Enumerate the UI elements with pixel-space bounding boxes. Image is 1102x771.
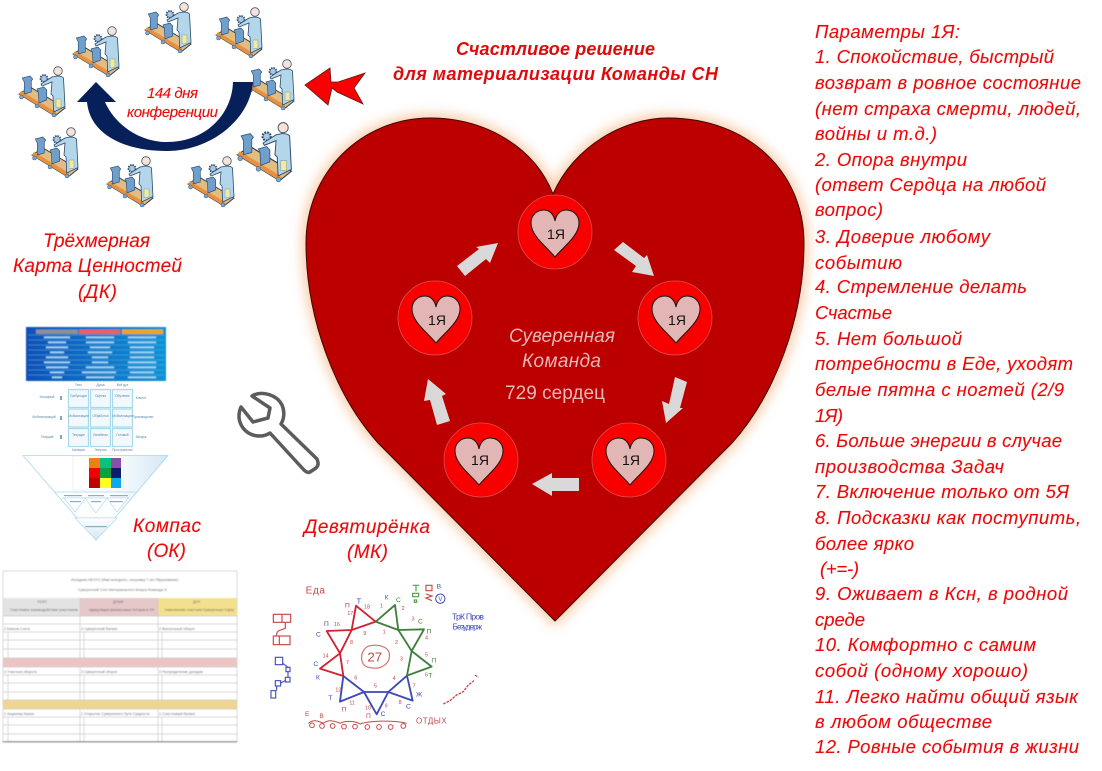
thumbnail: hand-drawn nine-point star: 16 [334, 622, 340, 628]
thumbnail: hand-drawn nine-point star: П [342, 707, 347, 714]
node: 1Я lower right [592, 423, 666, 497]
node: 1Я lower right: 1Я [622, 452, 640, 468]
thumbnail: hand-drawn nine-point star: С [313, 661, 318, 668]
thumbnail: 3x3 matrix: Материя [72, 448, 85, 452]
parameters list: 4. Стремление делать [815, 276, 1027, 297]
node: 1Я left: 1Я [428, 312, 446, 328]
thumbnail: hand-drawn nine-point star: V [438, 597, 442, 603]
wrench icon [239, 393, 318, 472]
thumbnail: hand-drawn nine-point star: 3 [412, 617, 415, 623]
thumbnail: 3x3 matrix: Текущие [72, 433, 85, 437]
parameters list: производства Задач [815, 456, 1004, 477]
heart caption: Команда [522, 351, 601, 372]
node: 1Я right: 1Я [668, 312, 686, 328]
thumbnail: 3x3 matrix: Готовый [116, 433, 129, 437]
thumbnail: hand-drawn nine-point star: 11 [349, 701, 355, 707]
cycle arrows [424, 242, 687, 496]
parameters list: белые пятна с ногтей (2/9 [815, 379, 1064, 400]
thumbnail: 3x3 matrix: Линейная [93, 433, 108, 437]
parameters list: Параметры 1Я: [815, 21, 960, 42]
title: Счастливое решение [456, 39, 655, 59]
label: 144 days of conference: 144 дня [147, 85, 198, 102]
label: 144 days of conference [127, 85, 219, 121]
thumbnail: hand-drawn nine-point star: К [385, 594, 389, 601]
node: 1Я lower left [444, 423, 518, 497]
thumbnail: report table: Наполнение счастьем Суверенных Сфер [165, 608, 234, 612]
thumbnail: hand-drawn nine-point star: Еда [306, 585, 325, 596]
thumbnail: hand-drawn nine-point star: 2 [395, 640, 398, 646]
parameters list: 2. Опора внутри [814, 149, 967, 170]
thumbnail: report table: 1 Счастливый баланс [159, 712, 195, 716]
parameters list: 3. Доверие любому [815, 226, 992, 247]
parameters list: собой (одному хорошо) [815, 660, 1028, 681]
thumbnail: 3x3 matrix: Всё дух [117, 383, 129, 387]
thumbnail: report table: 3 Распределение доходов [159, 670, 203, 674]
heart glow and main heart [306, 118, 804, 621]
thumbnail: hand-drawn nine-point star: Т [328, 695, 332, 702]
thumbnail: 3x3 matrix: Мобилизующий [32, 415, 56, 419]
thumbnail: 3x3 matrix: Энергия [94, 448, 107, 452]
parameters list: 9. Оживает в Ксн, в родной [815, 583, 1068, 604]
thumbnail: hand-drawn nine-point star: Т [428, 672, 432, 679]
thumbnail: triangle compass [23, 456, 168, 540]
thumbnail: hand-drawn nine-point star: 6 [354, 675, 357, 681]
thumbnail: hand-drawn nine-point star: 8 [399, 700, 402, 706]
parameters list: 5. Нет большой [815, 328, 962, 349]
thumbnail: 3x3 matrix: Производство [133, 415, 154, 419]
label: 3D value map [13, 231, 182, 303]
parameters list: (ответ Сердца на любой [815, 174, 1046, 195]
thumbnail: hand-drawn nine-point star [271, 584, 484, 729]
thumbnail: value map table [26, 327, 166, 381]
thumbnail: 3x3 matrix: Текущий [41, 435, 54, 439]
parameters list: 8. Подсказки как поступить, [815, 507, 1081, 528]
thumbnail: report table: ДУША [113, 600, 124, 604]
thumbnail: hand-drawn nine-point star: С [406, 703, 411, 710]
thumbnail: hand-drawn nine-point star: 6 [425, 673, 428, 679]
thumbnail: hand-drawn nine-point star: 18 [364, 605, 370, 611]
parameters list: возврат в ровное состояние [815, 72, 1081, 93]
node: 1Я left [398, 281, 472, 355]
parameters list: в любом обществе [815, 711, 992, 732]
thumbnail: hand-drawn nine-point star: П [324, 621, 329, 628]
thumbnail: report table: 2 Банков Счета [4, 627, 30, 631]
thumbnail: hand-drawn nine-point star: 1 [380, 603, 383, 609]
label: 3D value map: Карта Ценностей [13, 256, 182, 277]
thumbnail: report table: Счастливое взаимодействие участников [10, 608, 78, 612]
thumbnail: hand-drawn nine-point star: 12 [335, 688, 341, 694]
thumbnail: hand-drawn nine-point star: С [418, 618, 423, 625]
thumbnail: hand-drawn nine-point star: 9 [363, 631, 366, 637]
thumbnail: report table: 2 Суверенный баланс [81, 627, 118, 631]
node: 1Я top [518, 195, 592, 269]
thumbnail: 3x3 matrix: Мобилизация [112, 414, 133, 418]
node: 1Я right [638, 281, 712, 355]
heart caption: 729 сердец [505, 383, 605, 404]
thumbnail: 3x3 matrix: Душа [96, 383, 105, 387]
thumbnail: hand-drawn nine-point star: К [316, 674, 320, 681]
parameters list: 10. Комфортно с самим [815, 634, 1036, 655]
label: compass [133, 516, 202, 562]
thumbnail: hand-drawn nine-point star: С [396, 597, 401, 604]
parameters list: войны и т.д.) [815, 123, 937, 144]
parameters list: (нет страха смерти, людей, [815, 98, 1081, 119]
conference ring of workers [19, 3, 294, 207]
parameters list: 1Я) [815, 405, 843, 426]
thumbnail: hand-drawn nine-point star: П [431, 658, 436, 665]
thumbnail: report table: 2 Вексельный оборот [159, 627, 195, 631]
thumbnail: hand-drawn nine-point star: 4 [393, 676, 396, 682]
thumbnail: hand-drawn nine-point star: 7 [413, 683, 416, 689]
thumbnail: hand-drawn nine-point star: ОТДЫХ [416, 716, 447, 725]
thumbnail: hand-drawn nine-point star: ТрК Пров [452, 611, 484, 621]
thumbnail: hand-drawn nine-point star: 10 [365, 705, 371, 711]
thumbnail: report table: 3 Суверенный оборот [81, 670, 118, 674]
label: 144 days of conference: конференции [127, 104, 219, 121]
thumbnail: report table [3, 571, 237, 742]
thumbnail: hand-drawn nine-point star: 5 [374, 683, 377, 689]
thumbnail: 3x3 matrix [32, 383, 154, 452]
thumbnail: 3x3 matrix: Обработка [92, 414, 109, 418]
thumbnail: hand-drawn nine-point star: В [319, 713, 324, 720]
title [393, 39, 719, 84]
title: для материализации Команды СН [393, 64, 719, 84]
thumbnail: report table: 1 Акционер Банка [4, 712, 34, 716]
thumbnail: hand-drawn nine-point star: С [316, 632, 321, 639]
thumbnail: hand-drawn nine-point star: П [427, 628, 432, 635]
thumbnail: hand-drawn nine-point star: П [345, 602, 350, 609]
heart caption: Суверенная [509, 326, 615, 347]
thumbnail: report table: 3 Участков оборота [4, 670, 37, 674]
thumbnail: 3x3 matrix: Обучение [115, 394, 130, 398]
thumbnail: 3x3 matrix: Пространство [112, 448, 133, 452]
parameters list: среде [815, 609, 865, 630]
parameters list: вопрос) [815, 199, 883, 220]
parameters list: 12. Ровные события в жизни [815, 736, 1079, 757]
thumbnail: hand-drawn nine-point star: 5 [425, 653, 428, 659]
label: compass: (ОК) [147, 541, 186, 562]
parameters list: событию [815, 252, 902, 273]
node: 1Я top: 1Я [547, 226, 565, 242]
thumbnail: hand-drawn nine-point star: 27 [367, 649, 382, 664]
parameters list: 7. Включение только от 5Я [815, 481, 1069, 502]
parameters list: 1. Спокойствие, быстрый [815, 46, 1054, 67]
label: compass: Компас [133, 516, 202, 537]
label: 3D value map: Трёхмерная [43, 231, 150, 252]
thumbnail: report table: ТЕЛО [37, 600, 47, 604]
thumbnail: hand-drawn nine-point star: Е [305, 711, 310, 718]
thumbnail: hand-drawn nine-point star: 9 [385, 703, 388, 709]
thumbnail: report table: ДУХ [193, 600, 201, 604]
thumbnail: hand-drawn nine-point star: 7 [346, 660, 349, 666]
label: nine: (МК) [347, 542, 388, 563]
parameters list: потребности в Еде, уходят [815, 353, 1073, 374]
label: nine: Девятирёнка [302, 517, 430, 538]
thumbnail: hand-drawn nine-point star: 8 [350, 640, 353, 646]
thumbnail: hand-drawn nine-point star: 2 [402, 606, 405, 612]
parameters list [814, 21, 1081, 757]
label: 3D value map: (ДК) [78, 282, 117, 303]
red arrow pointing to conference ring [305, 68, 365, 105]
thumbnail: hand-drawn nine-point star: 14 [323, 653, 329, 659]
thumbnail: 3x3 matrix: Требующие [70, 394, 87, 398]
node: 1Я lower left: 1Я [471, 452, 489, 468]
thumbnail: report table: Циркуляция финансовых потоков в СН [89, 608, 155, 612]
parameters list: 6. Больше энергии в случае [815, 430, 1062, 451]
parameters list: 11. Легко найти общий язык [815, 686, 1079, 707]
thumbnail: hand-drawn nine-point star: 17 [347, 611, 353, 617]
parameters list: более ярко [815, 533, 914, 554]
thumbnail: 3x3 matrix: Исходный [40, 395, 55, 399]
thumbnail: hand-drawn nine-point star: П [366, 713, 371, 720]
curved navy arrow [77, 82, 253, 151]
thumbnail: hand-drawn nine-point star: Безудерж [453, 622, 483, 631]
parameters list: (+=-) [820, 558, 859, 579]
thumbnail: 3x3 matrix: Клиент [136, 396, 147, 400]
parameters list: Счастье [815, 302, 892, 323]
thumbnail: hand-drawn nine-point star: В [437, 584, 442, 591]
label: nine [302, 517, 430, 563]
thumbnail: hand-drawn nine-point star: 3 [400, 657, 403, 663]
heart caption [505, 326, 615, 404]
thumbnail: report table: Суверенный Счет Материального Конуса Команды А [78, 588, 167, 592]
thumbnail: hand-drawn nine-point star: 1 [383, 629, 386, 635]
thumbnail: report table: Исходная НЕЧТО (Имя исходного, например 7-ая Образование) [71, 578, 178, 582]
thumbnail: hand-drawn nine-point star: Т [357, 596, 362, 605]
thumbnail: hand-drawn nine-point star: Ж [416, 692, 423, 699]
thumbnail: hand-drawn nine-point star: С [381, 711, 386, 718]
thumbnail: hand-drawn nine-point star: 4 [425, 635, 428, 641]
thumbnail: 3x3 matrix: Оценка [95, 394, 106, 398]
thumbnail: 3x3 matrix: Мобилизация [68, 414, 89, 418]
thumbnail: 3x3 matrix: Выпуск [136, 435, 147, 439]
thumbnail: report table: 1 Открытие Суверенного Пути Сущности [81, 712, 150, 716]
thumbnail: 3x3 matrix: Тело [75, 383, 82, 387]
